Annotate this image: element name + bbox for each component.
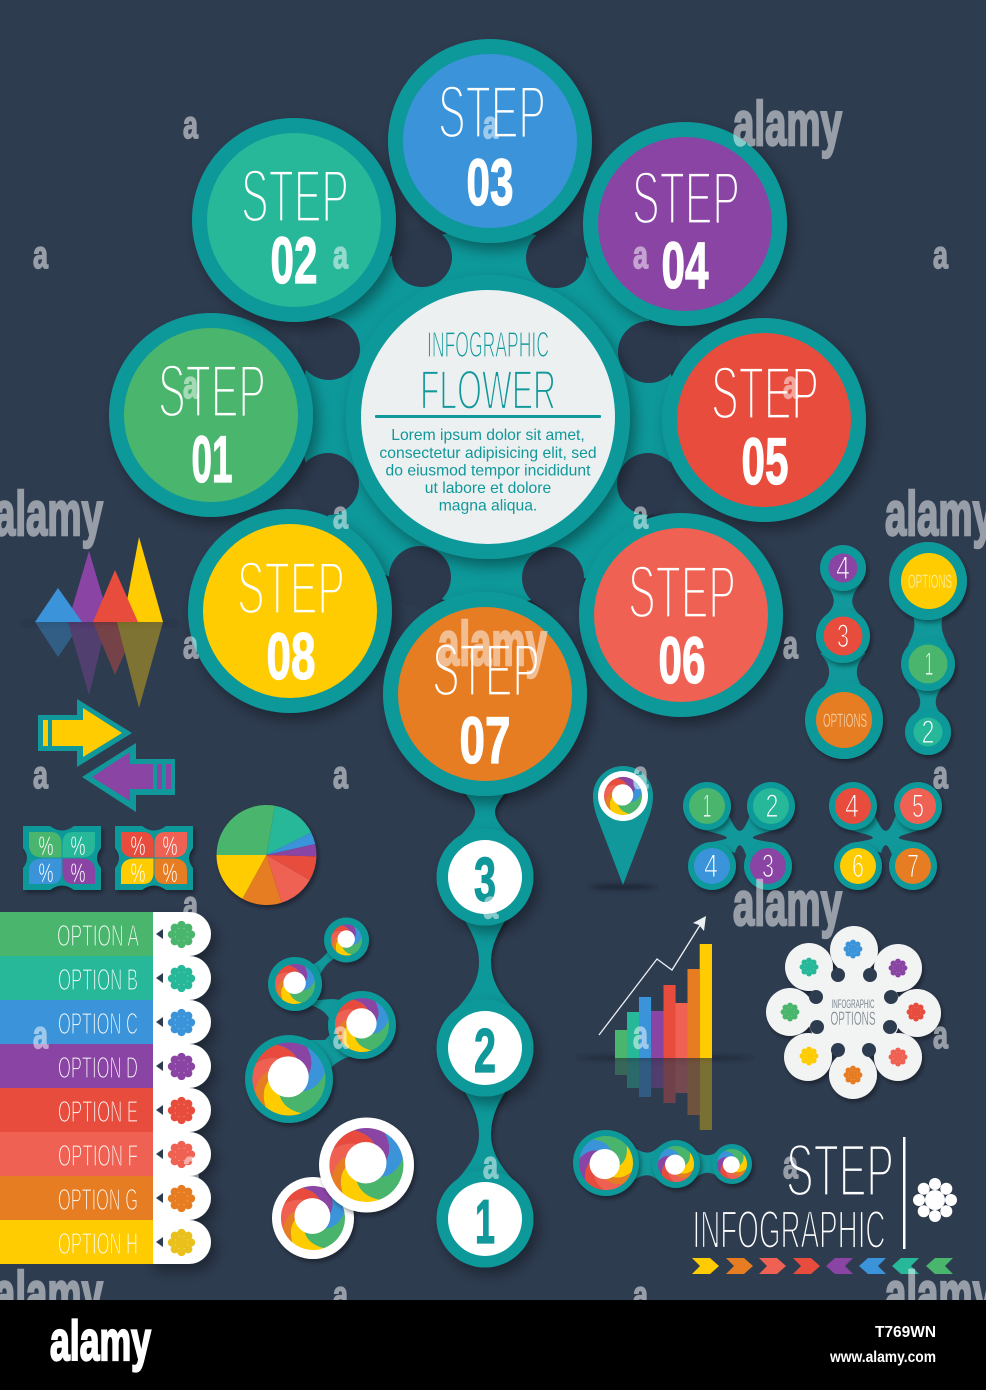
step infographic title [692, 1129, 957, 1260]
chain with options orange [805, 545, 883, 759]
chain with options yellow [889, 542, 967, 755]
option D: OPTION D [58, 1050, 138, 1085]
watermarks: a [483, 104, 498, 147]
cluster node large [328, 991, 396, 1059]
option D [0, 1044, 195, 1088]
watermarks: a [183, 884, 198, 927]
watermarks: a [633, 494, 648, 537]
flower teal body with gaps [297, 227, 680, 609]
step 03 [388, 39, 592, 243]
node 4: 4 [836, 550, 850, 586]
body gaps [809, 968, 898, 1057]
step 03: STEP [438, 70, 546, 154]
step 01: 01 [192, 422, 232, 496]
clover node 1: 1 [702, 788, 712, 824]
watermarks: a [783, 624, 798, 667]
step 04: 04 [662, 228, 709, 302]
percent tile warm: % [162, 831, 178, 861]
watermarks: a [483, 884, 498, 927]
step 01 [109, 313, 313, 517]
mountain triangle chart [22, 537, 178, 708]
step 06: STEP [628, 550, 736, 634]
option F: OPTION F [58, 1138, 138, 1173]
node 3 [436, 828, 534, 926]
step 03: 03 [466, 145, 514, 219]
bar chart [577, 916, 753, 1130]
option B [0, 956, 195, 1000]
node 1 [901, 637, 955, 691]
watermarks: a [633, 234, 648, 277]
watermarks: a [333, 754, 348, 797]
step 07: STEP [432, 628, 540, 712]
watermarks: a [183, 364, 198, 407]
option C: OPTION C [58, 1006, 138, 1041]
clover node 4: 4 [845, 788, 859, 824]
cluster node largest [245, 1035, 333, 1123]
option C [0, 1000, 195, 1044]
options list [0, 912, 211, 1264]
percent tile warm: % [130, 858, 146, 888]
body text: do eiusmod tempor incididunt [386, 462, 591, 480]
yellow arrow [38, 699, 132, 767]
percent tile cool: % [70, 858, 86, 888]
clover node 2: 2 [766, 788, 778, 824]
option G [0, 1176, 195, 1220]
watermarks: a [333, 1274, 348, 1317]
watermarks: a [933, 754, 948, 797]
clover 4 to 7 [829, 782, 942, 890]
step 02: STEP [241, 154, 349, 238]
centre disc [346, 275, 630, 559]
chain node medium [652, 1140, 700, 1188]
title vertical rule [903, 1137, 906, 1249]
option A [0, 912, 195, 956]
website: www.alamy.com [829, 1349, 936, 1366]
cluster node small [324, 918, 369, 962]
step 07 [383, 592, 587, 796]
divider [375, 415, 601, 418]
base shadow [577, 1056, 753, 1060]
trend arrow [599, 916, 706, 1035]
node 3: 3 [474, 846, 496, 915]
flower label large: OPTIONS [830, 1009, 876, 1030]
node options [805, 681, 883, 759]
step 02 [192, 118, 396, 322]
percent tile warm: % [162, 858, 178, 888]
white swirl small [272, 1177, 354, 1259]
watermarks: a [483, 1144, 498, 1187]
image id: T769WN [875, 1324, 936, 1341]
watermarks: a [633, 1274, 648, 1317]
arrow pair [38, 699, 175, 812]
node 4 [820, 545, 866, 591]
clover node 6: 6 [852, 848, 864, 884]
step 07: 07 [460, 703, 510, 777]
option E: OPTION E [58, 1094, 138, 1129]
body text: Lorem ipsum dolor sit amet, [391, 427, 585, 444]
title step: STEP [786, 1129, 894, 1212]
body text: magna aliqua. [439, 498, 537, 514]
reflection [35, 622, 163, 708]
chevron row [692, 1258, 953, 1274]
stem necks [450, 772, 520, 1186]
node 1: 1 [475, 1188, 495, 1257]
node 3 [816, 609, 870, 663]
chain node small [712, 1144, 752, 1184]
flower diagram [109, 39, 866, 796]
watermarks: a [933, 1014, 948, 1057]
step 08: STEP [237, 546, 345, 630]
percent tile cool: % [70, 831, 86, 861]
watermarks: a [33, 1014, 48, 1057]
percent tile warm: % [130, 831, 146, 861]
step 06 [579, 513, 783, 717]
bars [615, 944, 712, 1058]
percent tile cool [23, 826, 101, 890]
body text [379, 427, 597, 514]
swirl cluster [245, 918, 396, 1123]
vertical stem with numbered nodes [436, 772, 534, 1268]
watermarks: a [783, 1144, 798, 1187]
flower label small: INFOGRAPHIC [832, 997, 875, 1011]
clover node 5: 5 [912, 788, 924, 824]
node options [889, 542, 967, 620]
option E [0, 1088, 195, 1132]
node 1 [436, 1170, 534, 1268]
watermarks: a [33, 234, 48, 277]
white tabs [150, 912, 211, 1264]
watermarks: a [633, 754, 648, 797]
watermarks: a [633, 1014, 648, 1057]
step 08 [188, 509, 392, 713]
bottom credit bar [0, 1300, 986, 1390]
percent tile cool: % [38, 831, 54, 861]
watermarks: alamy [438, 610, 547, 679]
clover node 3: 3 [762, 848, 774, 884]
step 06: 06 [658, 623, 706, 697]
step 01: STEP [158, 349, 266, 433]
cluster node medium [268, 957, 322, 1011]
base shadow [22, 622, 178, 624]
option A: OPTION A [57, 918, 139, 953]
step 05: STEP [711, 351, 819, 435]
white flower icon [913, 1178, 957, 1222]
chain node large [571, 1128, 641, 1198]
watermarks: a [333, 1014, 348, 1057]
white swirl pair [272, 1118, 414, 1259]
percent tile warm [115, 826, 193, 890]
white swirl large [319, 1118, 414, 1212]
node 1: 1 [924, 646, 934, 682]
body text: ut labore et dolore [425, 480, 551, 497]
node 2 [905, 709, 951, 755]
clover node 4: 4 [704, 848, 718, 884]
centre disc: INFOGRAPHIC [427, 324, 549, 365]
peaks [123, 537, 163, 622]
percent tile cool: % [38, 858, 54, 888]
node 2: 2 [474, 1017, 496, 1086]
step 08: 08 [266, 619, 316, 693]
step 05: 05 [742, 424, 788, 498]
watermarks: a [783, 364, 798, 407]
location pin [590, 766, 656, 890]
infographic options white flower [766, 926, 941, 1099]
clover 1 to 4 [683, 782, 795, 890]
option G: OPTION G [58, 1182, 138, 1217]
alamy logo: alamy [50, 1309, 151, 1372]
step 05 [662, 318, 866, 522]
step 04: STEP [632, 156, 740, 240]
option H: OPTION H [58, 1226, 138, 1261]
watermarks: a [933, 234, 948, 277]
bar reflection [615, 1058, 712, 1130]
body text: consectetur adipisicing elit, sed [379, 445, 597, 462]
clover node 7: 7 [907, 848, 919, 884]
step 02: 02 [270, 223, 318, 297]
white flower body [766, 926, 941, 1099]
node options: OPTIONS [823, 711, 867, 732]
watermarks: alamy [733, 870, 842, 939]
purple arrow [82, 743, 175, 812]
node 3: 3 [837, 618, 849, 654]
node 2 [436, 1000, 534, 1096]
watermarks: a [33, 754, 48, 797]
step 04 [583, 122, 787, 326]
option B: OPTION B [58, 962, 138, 997]
watermarks: a [183, 104, 198, 147]
option H [0, 1220, 195, 1264]
cluster connectors [305, 946, 360, 1075]
horizontal swirl chain [571, 1128, 752, 1198]
mini flowers [781, 940, 925, 1084]
watermarks: a [183, 1144, 198, 1187]
node 2: 2 [922, 714, 934, 750]
watermarks: a [183, 624, 198, 667]
watermarks: a [333, 494, 348, 537]
option F [0, 1132, 195, 1176]
watermarks: alamy [733, 90, 842, 159]
watermarks: a [333, 234, 348, 277]
pie chart [216, 805, 317, 905]
centre title large: FLOWER [420, 358, 556, 421]
